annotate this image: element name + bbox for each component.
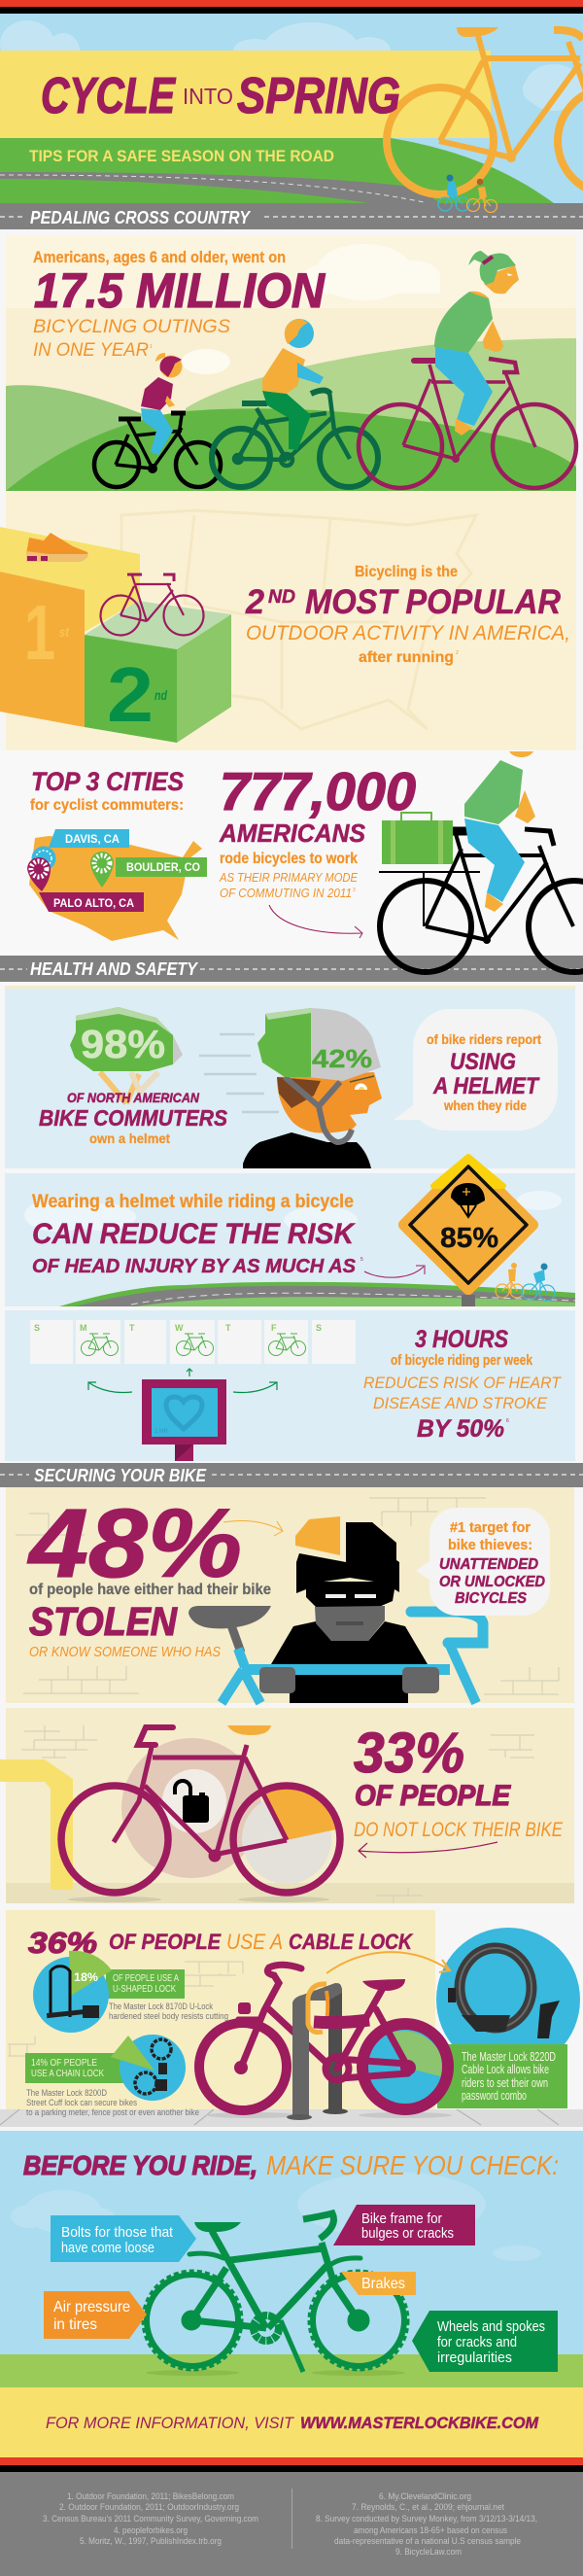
footer stripes [0, 2457, 583, 2472]
text: stolen: OR KNOW SOMEONE WHO HAS [29, 1644, 221, 1660]
heading: 36 percent: 36% [28, 1926, 97, 1960]
text: 2nd most popular: after running [359, 649, 454, 666]
arrow [223, 1520, 283, 1536]
heading: before you ride: BEFORE YOU RIDE, [23, 2150, 257, 2180]
panel: 17.5 million outings [6, 235, 576, 491]
text: U lock description: The Master Lock 8170D U-Lock [109, 2002, 213, 2011]
icon: black bike with girl [94, 353, 221, 487]
text: 2nd most popular: MOST POPULAR [305, 583, 562, 621]
panel: commuters [0, 750, 583, 956]
icon: running shoe [26, 533, 88, 562]
icon: commuter on black bike with suitcase [379, 751, 583, 972]
text: 2nd most popular: OUTDOOR ACTIVITY IN AMERICA, [246, 622, 570, 644]
text: 777,000 americans: AS THEIR PRIMARY MODE [219, 870, 358, 885]
text: stolen: STOLEN [29, 1599, 178, 1644]
label: chain lock: 14% OF PEOPLE [31, 2058, 97, 2069]
icon: green bike with boy [212, 319, 378, 487]
footnotes: 5. Moritz, W., 1997, PublishIndex.trb.org [80, 2536, 222, 2547]
securing band [0, 1463, 583, 1487]
text: intro: Americans, ages 6 and older, went on [33, 249, 286, 266]
chart: U-lock pie [33, 1951, 112, 2033]
label: U lock: U-SHAPED LOCK [113, 1984, 176, 1995]
text: 33%: OF PEOPLE [355, 1780, 511, 1812]
footer call to action [0, 2387, 583, 2457]
text: 3 hours [363, 1326, 562, 1443]
text: 3 hours: of bicycle riding per week [391, 1353, 533, 1369]
calendar: M [80, 1323, 87, 1333]
icon: open padlock [175, 1781, 209, 1823]
chart: chain lock pie [111, 2035, 186, 2101]
header panel [0, 0, 583, 203]
label: cable lock: password combo [462, 2088, 527, 2103]
callout: bolts [51, 2215, 196, 2262]
text: reduce risk: OF HEAD INJURY BY AS MUCH AS [32, 1256, 357, 1277]
text: top 3 cities: for cyclist commuters: [30, 797, 184, 814]
panel: cable lock [0, 1910, 583, 2127]
text: bike commuters: BIKE COMMUTERS [39, 1105, 228, 1131]
text: reduce risk [32, 1192, 363, 1277]
text: U lock description [109, 2002, 228, 2021]
icon: bike rack with locked purple bike [199, 1965, 452, 2120]
text: 2nd most popular: ND [268, 587, 295, 608]
arrow [269, 905, 362, 938]
icon: road sign [404, 1157, 532, 1306]
text: stolen: of people have either had their bike [29, 1582, 271, 1598]
callout: wheels [412, 2311, 558, 2372]
calendar: S [34, 1323, 40, 1333]
heading: before you ride [23, 2150, 559, 2180]
big number: 17.5 MILLION [34, 263, 326, 318]
label: Davis: DAVIS, CA [65, 832, 120, 846]
label: cable lock: riders to set their own [462, 2075, 548, 2090]
speech bubble [394, 1009, 558, 1131]
text: outings: BICYCLING OUTINGS [33, 316, 230, 337]
pie background [121, 1738, 261, 1878]
podium: first place: 1 [24, 589, 55, 676]
calendar: F [271, 1323, 277, 1333]
arrows [88, 1369, 277, 1393]
callout: air pressure: Air pressure [53, 2299, 130, 2315]
text: bike commuters: own a helmet [89, 1131, 170, 1146]
speech bubble: of bike riders report [427, 1032, 541, 1047]
text: chain lock description: to a parking meter, fence post or even another bike [26, 2107, 199, 2117]
text: 2nd most popular [245, 564, 570, 666]
footnotes: 1. Outdoor Foundation, 2011; BikesBelong.com [67, 2491, 234, 2502]
heading: 36 percent: CABLE LOCK [289, 1930, 414, 1954]
footnotes: 6. My.ClevelandClinic.org [379, 2491, 471, 2502]
speech bubble: OR UNLOCKED [439, 1574, 545, 1590]
rack [0, 1759, 73, 1890]
title [41, 68, 400, 124]
footnotes: 2. Outdoor Foundation, 2011; OutdoorIndustry.org [59, 2502, 239, 2513]
label: cable lock [437, 2044, 567, 2108]
footer call to action: FOR MORE INFORMATION, VISIT [46, 2414, 295, 2432]
text: 3 hours: 6 [506, 1418, 509, 1424]
label: U lock [106, 1969, 185, 1999]
label: U lock: OF PEOPLE USE A [113, 1973, 179, 1984]
footnotes: among Americans 18-65+ based on census [354, 2525, 507, 2536]
text: 2nd most popular: Bicycling is the [355, 564, 458, 580]
icon: purple bike [61, 1725, 340, 1893]
panel: before you ride [0, 2131, 583, 2387]
footnotes: 9. BicycleLaw.com [395, 2547, 462, 2558]
speed lines [199, 1034, 279, 1112]
label: chain lock [25, 2053, 126, 2083]
panel: stolen [6, 1487, 574, 1703]
callout: bolts: Bolts for those that [61, 2224, 174, 2241]
title: INTO [183, 84, 233, 109]
text: 777,000 americans: OF COMMUTING IN 2011 [220, 886, 352, 900]
footnotes: 4. peopleforbikes.org [114, 2525, 188, 2536]
text: chain lock description: Street Cuff lock can secure bikes [26, 2098, 137, 2107]
panel: head injury [5, 1157, 575, 1306]
title: SPRING [237, 68, 400, 124]
panel: do not lock [0, 1708, 574, 1903]
chart: wheel pie [242, 1789, 336, 1884]
panel: helmets [0, 982, 583, 1168]
icon: thief on bike [189, 1516, 483, 1703]
chart: U-lock pie: 18% [74, 1972, 98, 1984]
text: U lock description: hardened steel body resists cutting [109, 2011, 228, 2021]
callout: air pressure [44, 2291, 147, 2339]
speech bubble [416, 1508, 550, 1616]
heading: 36 percent: OF PEOPLE [109, 1930, 222, 1954]
arrow [359, 1842, 497, 1858]
callout: bike frame [333, 2205, 475, 2245]
footnotes [0, 2472, 583, 2576]
calendar: T [225, 1323, 231, 1333]
podium: second place: nd [154, 687, 167, 703]
text: 777,000 americans: 777,000 [220, 761, 416, 821]
speech bubble: USING [450, 1049, 516, 1075]
callout: brakes [341, 2272, 416, 2295]
callout: brakes: Brakes [361, 2276, 405, 2292]
footnotes: 3. Census Bureau's 2011 Community Survey, Governing.com [43, 2514, 258, 2524]
text: 3 hours: REDUCES RISK OF HEART [363, 1374, 562, 1392]
arrow [364, 1266, 425, 1277]
section heading: pedaling: PEDALING CROSS COUNTRY [30, 208, 252, 227]
subtitle: TIPS FOR A SAFE SEASON ON THE ROAD [29, 147, 334, 165]
panel: 3 hours per week [5, 1310, 575, 1461]
map: top cities [27, 829, 207, 941]
label: Boulder [90, 852, 207, 888]
calendar: S [316, 1323, 322, 1333]
footer call to action: WWW.MASTERLOCKBIKE.COM [300, 2414, 539, 2432]
callout: bolts: have come loose [61, 2240, 154, 2256]
speech bubble: #1 target for [450, 1519, 531, 1536]
text: outings: 1 [150, 344, 153, 350]
text: reduce risk: CAN REDUCE THE RISK [32, 1218, 356, 1250]
calendar [30, 1320, 356, 1364]
label: Palo Alto: PALO ALTO, CA [53, 896, 134, 910]
icon: tiny cyclists [438, 175, 497, 212]
callout: air pressure: in tires [53, 2316, 97, 2333]
icon: rider head with helmet [243, 1008, 382, 1168]
title: CYCLE [41, 68, 176, 124]
text: outings: IN ONE YEAR [33, 339, 149, 361]
icon: mini cyclists [496, 1263, 555, 1301]
calendar: W [175, 1323, 184, 1333]
text: 33% [354, 1722, 564, 1841]
icon: helmet 98% [70, 1007, 183, 1103]
podium: second place [85, 601, 231, 743]
text: 3 hours: DISEASE AND STROKE [373, 1394, 548, 1412]
heading: 36 percent [28, 1926, 414, 1960]
text: bike commuters: OF NORTH AMERICAN [67, 1090, 200, 1105]
calendar: T [129, 1323, 135, 1333]
label: Palo Alto [27, 857, 144, 912]
text: 33%: 33% [354, 1722, 464, 1785]
health band [0, 956, 583, 982]
text: 777,000 americans: 3 [353, 888, 356, 893]
header road band [0, 203, 583, 229]
map watermark [121, 510, 476, 729]
icon: small purple bike [101, 574, 204, 636]
section heading: health: HEALTH AND SAFETY [30, 959, 199, 979]
heading: 36 percent: USE A [226, 1930, 283, 1954]
podium: first place [0, 527, 140, 727]
text: stolen [29, 1582, 271, 1660]
footnotes: 7. Reynolds, C., et al., 2009; ehjournal.net [352, 2502, 504, 2513]
arrow [326, 1952, 450, 1973]
callout: bike frame: Bike frame for [361, 2210, 442, 2227]
icon: road sign: 85% [440, 1223, 498, 1254]
section heading: securing: SECURING YOUR BIKE [34, 1466, 207, 1485]
text: reduce risk: 5 [360, 1257, 363, 1263]
speech bubble: UNATTENDED [439, 1556, 538, 1573]
text: chain lock description [26, 2088, 199, 2117]
text: 777,000 americans: AMERICANS [219, 818, 366, 848]
text: 2nd most popular: 2 [245, 583, 265, 621]
label: Davis [31, 829, 129, 871]
podium: second place: 2 [107, 651, 154, 738]
callout: wheels: Wheels and spokes [437, 2319, 545, 2335]
podium: first place: st [59, 624, 70, 640]
icon: green bike [144, 2213, 407, 2376]
road [59, 1282, 575, 1306]
icon: heart sign [142, 1379, 226, 1461]
callout: bike frame: bulges or cracks [361, 2225, 454, 2242]
text: top 3 cities: TOP 3 CITIES [31, 767, 184, 796]
icon: helmet 98%: 98% [81, 1022, 165, 1066]
text: outings [33, 316, 230, 361]
speech bubble: bike thieves: [448, 1537, 532, 1553]
text: 777,000 americans [219, 761, 416, 900]
text: 3 hours: BY 50% [417, 1415, 504, 1443]
big number: 48% [27, 1489, 242, 1598]
icon: big orange bicycle [387, 27, 583, 194]
callout: wheels: irregularities [437, 2350, 512, 2366]
label: Boulder: BOULDER, CO [126, 860, 200, 874]
speech bubble: when they ride [443, 1098, 527, 1113]
panel: 2nd most popular [0, 492, 576, 750]
callout: wheels: for cracks and [437, 2335, 517, 2350]
chart: blue cable lock circle [436, 1928, 580, 2071]
icon: purple bike with woman [359, 251, 576, 488]
label: chain lock: USE A CHAIN LOCK [31, 2069, 104, 2079]
footnotes: data-representative of a national U.S census sample [334, 2536, 521, 2547]
text: 777,000 americans: rode bicycles to work [220, 851, 358, 867]
text: 2nd most popular: 2 [456, 650, 459, 656]
text: reduce risk: Wearing a helmet while riding a bicycle [32, 1192, 354, 1212]
text: 3 hours: 3 HOURS [415, 1326, 508, 1353]
text: bike commuters [39, 1090, 228, 1146]
footnotes: 8. Survey conducted by Survey Monkey, from 3/12/13-3/14/13, [316, 2514, 537, 2524]
text: top 3 cities [30, 767, 184, 814]
icon: rider head with helmet: 42% [312, 1044, 372, 1073]
text: chain lock description: The Master Lock 8200D [26, 2088, 107, 2098]
icon: heart sign: 1 HR [154, 1429, 168, 1435]
speech bubble: BICYCLES [455, 1590, 527, 1607]
speech bubble: A HELMET [432, 1073, 540, 1099]
